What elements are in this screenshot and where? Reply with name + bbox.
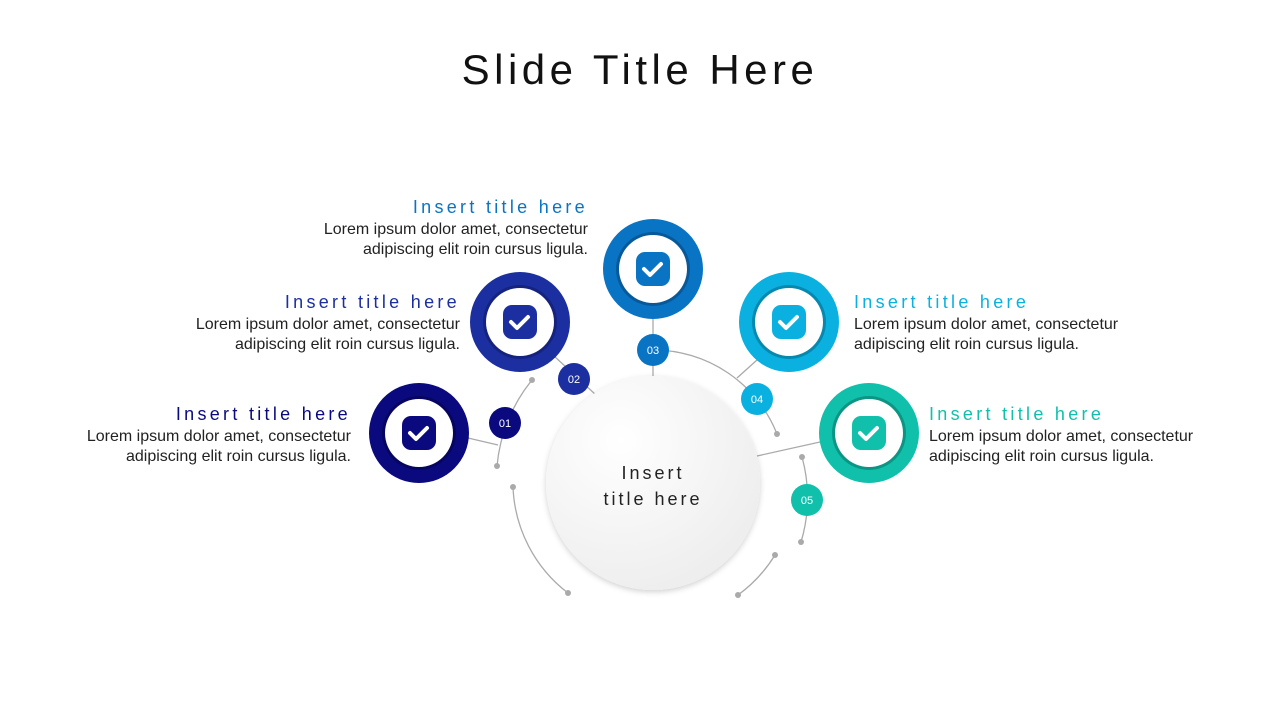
text block 01: adipiscing elit roin cursus ligula. [126,448,351,465]
center circle [546,376,760,590]
text block 04 [854,292,1118,353]
icon ring 02 [470,272,570,372]
text block 02: Insert title here [285,292,460,312]
icon ring 03 [603,219,703,319]
text block 05: Insert title here [929,404,1104,424]
icon ring 01 [369,383,469,483]
center circle: title here [603,489,703,509]
text block 03: Lorem ipsum dolor amet, consectetur [324,221,588,238]
text block 04: Lorem ipsum dolor amet, consectetur [854,316,1118,333]
text block 02 [196,292,460,353]
connector lines [468,318,820,595]
text block 03: adipiscing elit roin cursus ligula. [363,241,588,258]
icon ring 04 [739,272,839,372]
number badges: 03 [647,345,659,357]
icon ring 05 [819,383,919,483]
text block 04: Insert title here [854,292,1029,312]
text block 01: Lorem ipsum dolor amet, consectetur [87,428,351,445]
text block 02: Lorem ipsum dolor amet, consectetur [196,316,460,333]
center circle: Insert [621,463,685,483]
number badges [489,334,823,516]
text block 01: Insert title here [176,404,351,424]
text block 03 [324,197,588,258]
number badges: 01 [499,418,511,430]
text block 05: Lorem ipsum dolor amet, consectetur [929,428,1193,445]
title: Slide Title Here [462,46,818,93]
text block 05 [929,404,1193,465]
text block 01 [87,404,351,465]
number badges: 02 [568,374,580,386]
text block 05: adipiscing elit roin cursus ligula. [929,448,1154,465]
text block 04: adipiscing elit roin cursus ligula. [854,336,1079,353]
text block 02: adipiscing elit roin cursus ligula. [235,336,460,353]
text block 03: Insert title here [413,197,588,217]
number badges: 05 [801,495,813,507]
number badges: 04 [751,394,763,406]
